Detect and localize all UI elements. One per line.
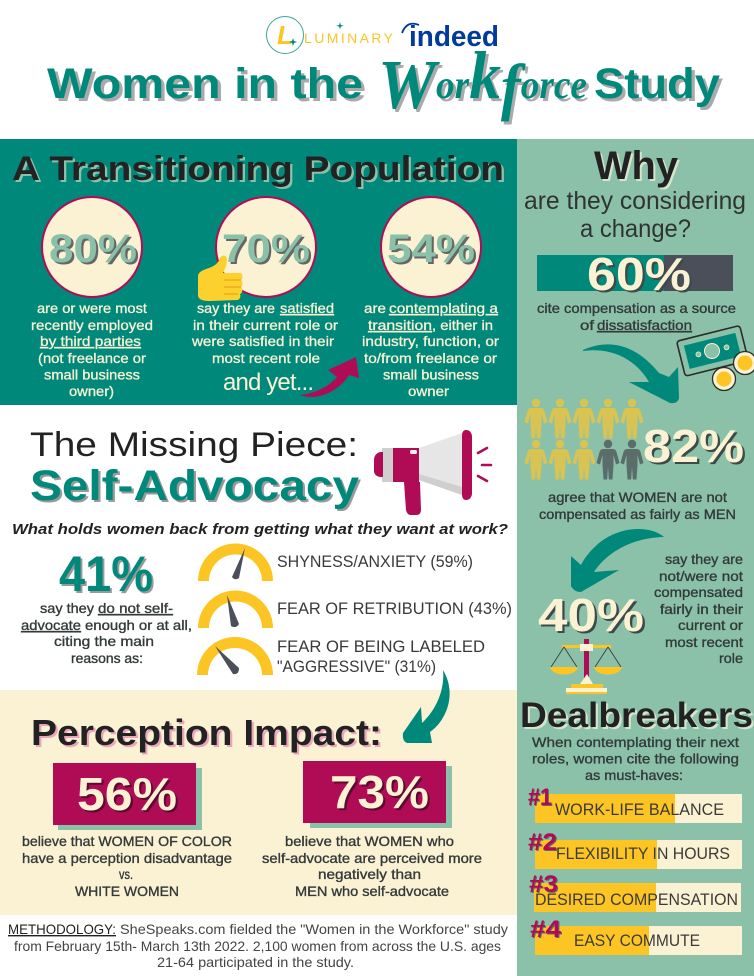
icon: thumbs up [198,256,242,301]
text: 40% description: say they are [665,551,743,567]
title: or [436,62,470,107]
text: 54% description: owner [408,383,449,399]
text: 80% description: recently employed [31,317,153,333]
stat: 82%: 82% [643,420,744,472]
text: 70% description: say they are [197,300,275,316]
text: 40% description: compensated [654,584,743,600]
heading: why: Why [594,144,679,188]
bar: desired compensation: #3 [529,871,558,898]
text: 56% description: have a perception disadvantage [22,850,232,866]
text: 60% description: of [580,317,594,333]
chart: people pictogram 82% [524,399,644,480]
text: methodology: METHODOLOGY: [8,921,116,937]
text: dealbreakers intro [532,734,739,783]
icon: scales [550,639,622,694]
panel: the missing piece [12,426,512,676]
heading: the missing piece: The Missing Piece: [30,426,358,464]
panel: why considering change [517,139,754,976]
text: 56% description: vs. [119,866,133,882]
label: shyness/anxiety: SHYNESS/ANXIETY (59%) [277,553,473,571]
title: Study [594,60,720,108]
text: methodology: from February 15th- March 13th 2022. 2,100 women from across the U.S. ages [14,938,501,954]
arrow: teal down right [583,344,679,403]
bar: easy commute: EASY COMMUTE [574,932,700,950]
subheading: are they considering a change [524,187,746,243]
heading: self-advocacy: Self-Advocacy [30,462,359,510]
bar: flexibility in hours: FLEXIBILITY IN HOURS [556,845,730,863]
text: 54% description: industry, function, or [362,333,499,349]
text: dealbreakers intro: When contemplating their next [532,734,739,750]
stat: 80% [42,197,142,297]
text: 40% description: fairly in their [660,601,743,617]
label: fear of being labeled aggressive: "AGGRESSIVE" (31%) [277,658,436,676]
panel: a transitioning population [0,139,517,405]
icon: money [677,326,754,390]
bar: easy commute [530,916,742,955]
text: 80% description: small business [44,366,140,382]
logo: Luminary: LUMINARY [304,30,394,46]
title: Women in the [47,60,363,108]
bar: desired compensation: DESIRED COMPENSATION [535,891,738,909]
bar: flexibility in hours: #2 [528,829,557,856]
text: 40% description: role [719,650,743,666]
text: 70% description: were satisfied in their [191,333,334,349]
text: 73% description [262,833,482,899]
logo: Luminary [266,16,394,54]
logo: Luminary: L [277,20,293,50]
text: 40% description [654,551,743,666]
chart: 60% bar: 60% [587,248,691,300]
text: 80% description: are or were most [37,300,147,316]
text: 54% description: to/from freelance or [364,350,497,366]
subheading: are they considering a change: a change? [580,215,691,243]
stat: 73% [303,761,452,828]
text: 41% description [21,600,192,666]
text: 40% description: current or [678,617,743,633]
text: dealbreakers intro: roles, women cite the following [532,750,739,766]
stat: 70%: 70% [222,227,310,271]
text: 41% description: enough or at all, [85,617,192,633]
text: 40% description: not/were not [659,568,743,584]
subheading: are they considering a change: are they considering [524,187,746,215]
text: 60% description: cite compensation as a source [537,300,736,316]
stat: 70% [216,197,316,297]
text: 80% description: by third parties [40,333,141,349]
text: 41% description: reasons as: [71,650,143,666]
text: 54% description: , either in [432,317,493,333]
text: 73% description: MEN who self-advocate [295,883,449,899]
label: fear of being labeled aggressive [277,638,485,676]
text: 54% description: contemplating a [389,300,498,316]
stat: 56% [53,763,202,830]
text: 40% description: most recent [665,634,743,650]
title: W [378,47,440,124]
icon: megaphone [374,430,491,515]
text: 54% description: small business [383,366,479,382]
text: 54% description: are [364,300,386,316]
text: 80% description: (not freelance or [38,350,146,366]
text: and yet: and yet... [223,369,314,396]
text: methodology [8,921,508,970]
text: 70% description: satisfied [280,300,334,316]
arrow: and yet to contemplating [300,357,359,397]
text: 82% description: agree that WOMEN are not [548,489,727,505]
text: 41% description: do not self- [98,600,173,616]
text: 54% description: transition [368,317,432,333]
heading: perception impact: Perception Impact: [31,712,382,753]
text: 56% description [22,833,232,899]
text: 41% description: say they [40,600,94,616]
gauge: fear of being labeled aggressive [197,637,273,675]
text: 41% description: citing the main [54,633,154,649]
arrow: teal down left [571,529,664,592]
header [47,16,720,124]
stat: 41%: 41% [59,546,153,602]
text: 82% description: compensated as fairly as MEN [539,506,736,522]
text: 80% description [31,300,153,399]
text: 70% description: in their current role or [193,317,338,333]
stat: 80%: 80% [49,227,137,271]
bar: easy commute: #4 [530,916,562,943]
text: 41% description: advocate [21,617,81,633]
heading: dealbreakers: Dealbreakers [520,696,753,735]
text: 60% description: dissatisfaction [597,317,692,333]
text: methodology: SheSpeaks.com fielded the "Women in the Workforce" study [120,921,508,937]
stat: 54% [381,197,481,297]
gauge: shyness/anxiety [198,544,273,581]
text: 82% description [539,489,736,522]
bar: desired compensation [529,871,741,912]
title: k [469,37,501,113]
panel: perception impact [0,670,517,915]
text: dealbreakers intro: as must-haves: [585,767,683,783]
heading: a transitioning population: A Transitioning Population [12,150,504,188]
title [47,37,720,124]
label: fear of being labeled aggressive: FEAR OF BEING LABELED [277,638,485,656]
arrow: teal to perception impact [403,670,450,743]
logo: indeed: indeed [409,21,499,53]
bar: work-life balance [528,784,742,823]
bar: work-life balance: #1 [528,784,552,811]
text: 70% description: most recent role [212,350,320,366]
text: question: What holds women back from getting what they want at work? [12,521,508,538]
bar: work-life balance: WORK-LIFE BALANCE [555,801,724,819]
text: 73% description: self-advocate are perceived more [262,850,482,866]
gauge: fear of retribution [198,591,273,628]
text: 73% description: believe that WOMEN who [285,833,454,849]
stat: 54%: 54% [387,227,475,271]
bar: flexibility in hours [528,829,742,869]
text: 60% description [537,300,736,333]
text: 70% description [191,300,338,366]
text: 56% description: WHITE WOMEN [75,883,179,899]
title: orce [521,62,587,107]
text: 80% description: owner) [69,383,114,399]
text: 56% description: believe that WOMEN OF COLOR [22,833,232,849]
stat: 73%: 73% [330,766,429,818]
label: fear of retribution: FEAR OF RETRIBUTION (43%) [277,600,512,618]
text: 73% description: negatively than [318,866,421,882]
text: methodology: 21-64 participated in the study. [157,954,354,970]
title: f [501,51,526,122]
chart: 60% bar [537,248,733,300]
stat: 56%: 56% [77,768,177,820]
text: 54% description [362,300,499,399]
stat: 40%: 40% [538,589,644,641]
